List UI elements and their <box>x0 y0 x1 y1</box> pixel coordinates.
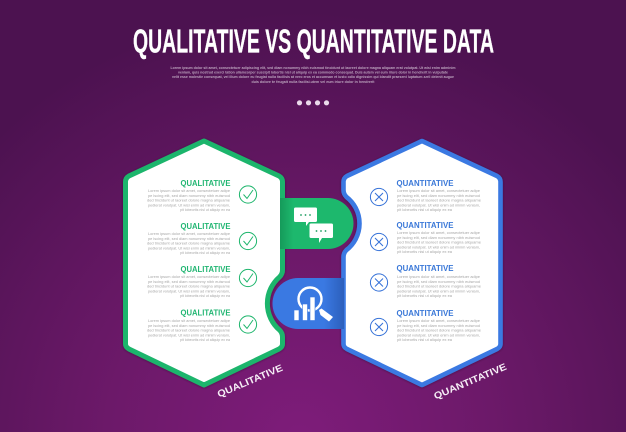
label: quantitative: QUANTITATIVE <box>432 361 509 402</box>
icon: chat bubbles <box>294 208 333 243</box>
item 1: quantitative <box>370 178 481 212</box>
item 1: qualitative: Lorem ipsum dolor sit amet, consectetuer adipe <box>148 189 230 193</box>
hexagon card: quantitative <box>344 141 500 385</box>
item 3: qualitative: QUALITATIVE <box>180 264 231 274</box>
item 2: qualitative: pe lscing elit, sed diam nonummy nibh euismod <box>148 237 230 241</box>
item 4: qualitative: pe lscing elit, sed diam nonummy nibh euismod <box>148 324 230 328</box>
item 4: quantitative: QUANTITATIVE <box>396 308 454 318</box>
green connector tab <box>280 198 354 249</box>
subtitle text block: veniam, quis nostrud exerci tation ullamcorper suscipit lobortis nisl ut aliquip ex ea commodo consequat. Duis autem vel eum iriure dolor in hendrerit in vulputate <box>178 70 449 75</box>
item 1: qualitative: ded tincidunt ut laoreet dolore magna aliquame <box>147 199 230 203</box>
item 3: qualitative: pit lobeortis nisl ut aliquip ex ea <box>180 294 231 298</box>
item 3: quantitative: pe lscing elit, sed diam nonummy nibh euismod <box>397 280 480 284</box>
item 1: qualitative: QUALITATIVE <box>180 178 231 188</box>
subtitle text block: Lorem ipsum dolor sit amet, consectetuer adipiscing elit, sed diam nonummy nibh euismod tincidunt ut laoreet dolore magna aliquam erat volutpat. Ut wisi enim adminim <box>170 65 456 70</box>
item 3: qualitative: pedierat volutpat. Ut wisi enim ad minim veniam, <box>148 289 230 293</box>
item 3: quantitative: QUANTITATIVE <box>396 263 454 273</box>
item 3: qualitative: ded tincidunt ut laoreet dolore magna aliquame <box>147 285 230 289</box>
item 1: quantitative: Lorem ipsum dolor sit amet, consectetuer adipe <box>397 189 480 193</box>
item 3: qualitative: pe lscing elit, sed diam nonummy nibh euismod <box>148 280 230 284</box>
item 3: qualitative <box>147 264 257 298</box>
item 3: quantitative <box>370 263 481 298</box>
item 4: qualitative: pit lobeortis nisl ut aliquip ex ea <box>180 338 231 342</box>
item 2: qualitative <box>147 221 257 255</box>
item 4: qualitative: ded tincidunt ut laoreet dolore magna aliquame <box>147 329 230 333</box>
item 4: quantitative <box>370 308 481 342</box>
icon: magnifier with bar chart <box>294 288 333 322</box>
item 1: quantitative: pedierat volutpat. Ut wisi enim ad minim veniam, <box>397 203 480 207</box>
item 2: quantitative: pe lscing elit, sed diam nonummy nibh euismod <box>397 236 480 240</box>
item 4: qualitative: Lorem ipsum dolor sit amet, consectetuer adipe <box>148 319 230 323</box>
item 3: quantitative: pit lobeortis nisl ut aliquip ex ea <box>397 294 453 298</box>
item 3: quantitative: pedierat volutpat. Ut wisi enim ad minim veniam, <box>397 289 480 293</box>
subtitle text block <box>170 65 456 84</box>
blue connector tab <box>272 278 344 329</box>
item 1: qualitative: pit lobeortis nisl ut aliquip ex ea <box>180 208 231 212</box>
item 4: quantitative: Lorem ipsum dolor sit amet, consectetuer adipe <box>397 319 480 323</box>
item 3: quantitative: ded tincidunt ut laoreet dolore magna aliquame <box>397 285 481 289</box>
item 3: qualitative: Lorem ipsum dolor sit amet, consectetuer adipe <box>148 275 230 279</box>
item 4: qualitative: pedierat volutpat. Ut wisi enim ad minim veniam, <box>148 333 230 337</box>
panel: quantitative <box>344 141 500 385</box>
item 2: quantitative: pit lobeortis nisl ut aliquip ex ea <box>397 250 453 254</box>
pagination dots <box>297 100 329 105</box>
item 1: quantitative: ded tincidunt ut laoreet dolore magna aliquame <box>397 199 481 203</box>
item 4: qualitative: QUALITATIVE <box>180 308 231 318</box>
subtitle text block: duis dolore te feugait nulla facilisi.utem vel eum iriure dolor in hendrerit <box>252 79 375 84</box>
panel: qualitative <box>126 141 282 385</box>
item 4: qualitative <box>147 308 257 342</box>
label: qualitative: QUALITATIVE <box>216 363 285 400</box>
hexagon card: qualitative <box>126 141 282 385</box>
item 1: qualitative <box>147 178 257 212</box>
item 2: quantitative: QUANTITATIVE <box>396 220 454 230</box>
item 4: quantitative: pe lscing elit, sed diam nonummy nibh euismod <box>397 324 480 328</box>
item 4: quantitative: pit lobeortis nisl ut aliquip ex ea <box>397 338 453 342</box>
item 2: qualitative: pedierat volutpat. Ut wisi enim ad minim veniam, <box>148 246 230 250</box>
item 1: quantitative: pe lscing elit, sed diam nonummy nibh euismod <box>397 194 480 198</box>
item 4: quantitative: pedierat volutpat. Ut wisi enim ad minim veniam, <box>397 333 480 337</box>
item 2: qualitative: Lorem ipsum dolor sit amet, consectetuer adipe <box>148 232 230 236</box>
item 1: qualitative: pedierat volutpat. Ut wisi enim ad minim veniam, <box>148 203 230 207</box>
item 2: qualitative: ded tincidunt ut laoreet dolore magna aliquame <box>147 242 230 246</box>
item 1: qualitative: pe lscing elit, sed diam nonummy nibh euismod <box>148 194 230 198</box>
item 2: qualitative: pit lobeortis nisl ut aliquip ex ea <box>180 251 231 255</box>
item 1: quantitative: QUANTITATIVE <box>396 178 454 188</box>
item 2: quantitative <box>370 220 481 254</box>
item 2: quantitative: Lorem ipsum dolor sit amet, consectetuer adipe <box>397 231 480 235</box>
item 1: quantitative: pit lobeortis nisl ut aliquip ex ea <box>397 208 453 212</box>
item 3: quantitative: Lorem ipsum dolor sit amet, consectetuer adipe <box>397 275 480 279</box>
subtitle text block: velit esse molestie consequat, vel illum dolore eu feugiat nulla facilisis at vero eros et accumsan et iusto odio dignissim qui blandit praesent luptatum zzril delenit augue <box>172 74 455 79</box>
item 2: quantitative: pedierat volutpat. Ut wisi enim ad minim veniam, <box>397 245 480 249</box>
item 2: quantitative: ded tincidunt ut laoreet dolore magna aliquame <box>397 241 481 245</box>
item 2: qualitative: QUALITATIVE <box>180 221 231 231</box>
item 4: quantitative: ded tincidunt ut laoreet dolore magna aliquame <box>397 329 481 333</box>
